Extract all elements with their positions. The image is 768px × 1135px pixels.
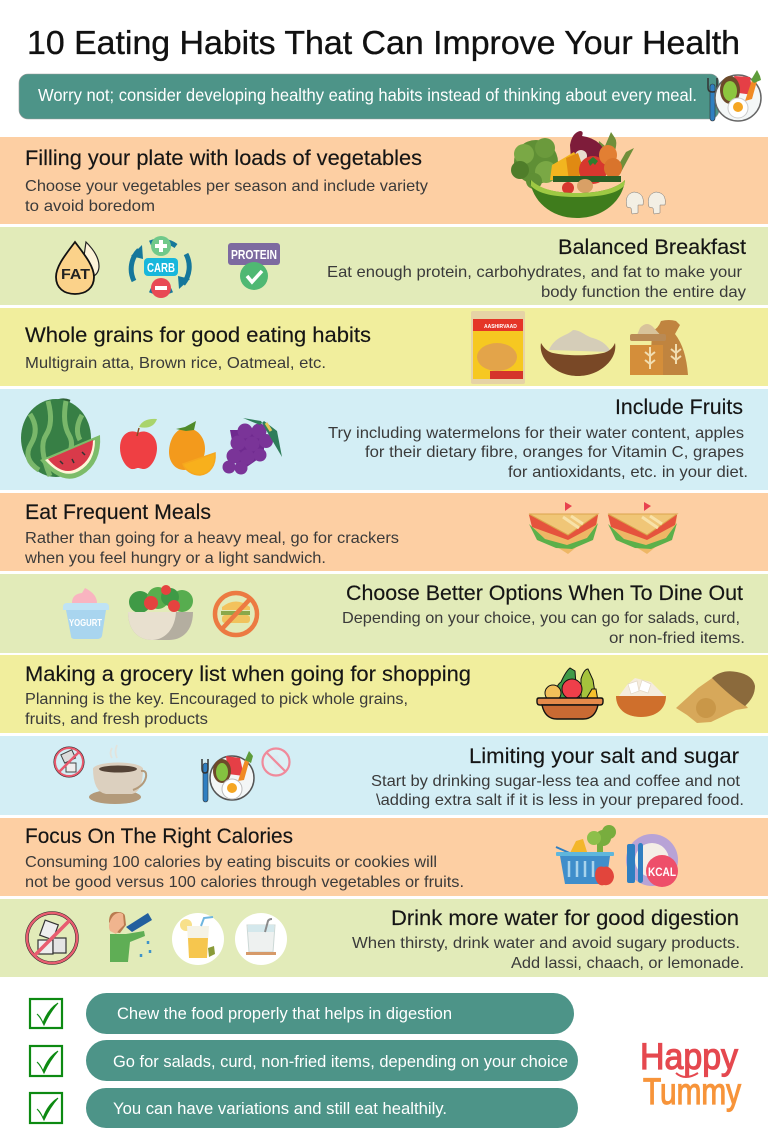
icon: plate with fork [202,751,254,802]
panel: dine out: or non-fried items. [609,630,745,647]
panel: grocery list [0,655,768,733]
icon: plate with fork [708,70,761,121]
icon: carb cycle: CARB [147,260,175,275]
icon: grain sack [630,320,688,375]
icon: atta pack [471,311,525,384]
icon: apple [120,419,157,469]
panel: water: When thirsty, drink water and avoid sugary products. [352,935,740,952]
icon: sandwich right [608,502,677,554]
title: 10 Eating Habits That Can Improve Your Health [27,24,740,61]
panel: whole grains: Whole grains for good eating habits [25,323,371,347]
panel: grocery list: fruits, and fresh products [25,711,208,728]
panel: water [0,899,768,977]
icon: sandwich left [529,502,598,554]
panel: grocery list: Planning is the key. Encouraged to pick whole grains, [25,691,408,708]
icon: kcal plate: KCAL [648,867,676,879]
icon: vegetable bowl [511,131,665,218]
icon: fat drop: FAT [61,267,90,283]
panel: balanced breakfast [0,227,768,305]
panel: vegetables: to avoid boredom [25,198,155,215]
panel: balanced breakfast: body function the entire day [541,284,746,301]
logo: Happy Tummy: Happy [640,1036,738,1077]
pill: salads [86,1040,578,1081]
pill: variations [86,1088,578,1128]
icon: no burger [215,593,257,635]
panel: dine out [0,574,768,653]
pill: variations: You can have variations and still eat healthily. [113,1100,447,1118]
panel: calories [0,818,768,896]
panel: water: Add lassi, chaach, or lemonade. [511,955,744,972]
panel: frequent meals: when you feel hungry or a light sandwich. [24,550,326,567]
checkbox 3 [30,1093,62,1123]
icon: no salt [262,748,290,776]
panel: frequent meals: Eat Frequent Meals [25,500,211,524]
panel: fruits [0,389,768,490]
pill: chew: Chew the food properly that helps in digestion [117,1005,452,1023]
panel: vegetables: Choose your vegetables per season and include variety [25,178,428,195]
icon: protein check: PROTEIN [231,247,277,262]
panel: calories: Focus On The Right Calories [25,824,293,848]
panel: salt and sugar: Start by drinking sugar-less tea and coffee and not [371,773,741,790]
icon: atta pack: AASHIRVAAD [484,324,517,330]
pill: salads: Go for salads, curd, non-fried items, depending on your choice [113,1053,568,1071]
icon: vegetable basket [556,825,616,885]
panel: vegetables: Filling your plate with loads of vegetables [25,146,422,170]
panel: salt and sugar [0,736,768,815]
pill: chew [86,993,574,1034]
panel: fruits: for their dietary fibre, oranges for Vitamin C, grapes [365,444,744,461]
icon: bowl of flour [541,330,615,376]
banner: intro message [19,74,719,119]
panel: whole grains: Multigrain atta, Brown rice, Oatmeal, etc. [25,355,326,372]
icon: fruit basket [537,668,603,719]
panel: water: Drink more water for good digestion [391,906,739,930]
panel: dine out: Choose Better Options When To Dine Out [346,581,743,605]
panel: dine out: Depending on your choice, you can go for salads, curd, [342,610,740,627]
icon: yogurt [63,588,109,639]
panel: balanced breakfast: Eat enough protein, carbohydrates, and fat to make your [327,264,743,281]
icon: lassi glass [235,913,287,965]
panel: whole grains [0,308,768,386]
panel: frequent meals: Rather than going for a heavy meal, go for crackers [25,530,399,547]
panel: vegetables [0,131,768,224]
panel: salt and sugar: Limiting your salt and sugar [469,744,739,768]
panel: salt and sugar: \adding extra salt if it is less in your prepared food. [376,792,744,809]
icon: sugar bowl [616,678,666,717]
icon: carb cycle [131,236,190,298]
checkbox 1 [30,999,62,1028]
panel: fruits: Try including watermelons for their water content, apples [328,425,744,442]
icon: kcal plate [626,834,678,887]
panel: fruits: for antioxidants, etc. in your diet. [508,464,748,481]
icon: no sugar [54,747,84,777]
logo: Happy Tummy: Tummy [643,1071,741,1112]
icon: grapes [222,418,282,474]
icon: grain sack [676,671,755,723]
panel: fruits: Include Fruits [615,395,743,419]
icon: yogurt: YOGURT [69,618,102,629]
icon: protein check [228,243,280,290]
icon: orange [169,421,215,475]
panel: calories: not be good versus 100 calories through vegetables or fruits. [25,874,464,891]
banner: intro message: Worry not; consider developing healthy eating habits instead of thinking about every meal. [38,85,697,105]
icon: fat drop [56,242,99,294]
icon: coffee cup [89,745,146,804]
icon: no ice cubes [27,913,77,963]
checkbox 2 [30,1046,62,1076]
icon: lemonade [172,913,224,965]
panel: grocery list: Making a grocery list when going for shopping [25,662,471,686]
icon: salad bowl [128,585,193,640]
panel: frequent meals [0,493,768,571]
logo: Happy Tummy [640,1036,741,1112]
panel: balanced breakfast: Balanced Breakfast [558,235,746,259]
icon: watermelon [21,399,100,479]
panel: calories: Consuming 100 calories by eating biscuits or cookies will [25,854,437,871]
icon: person drinking [109,912,152,962]
